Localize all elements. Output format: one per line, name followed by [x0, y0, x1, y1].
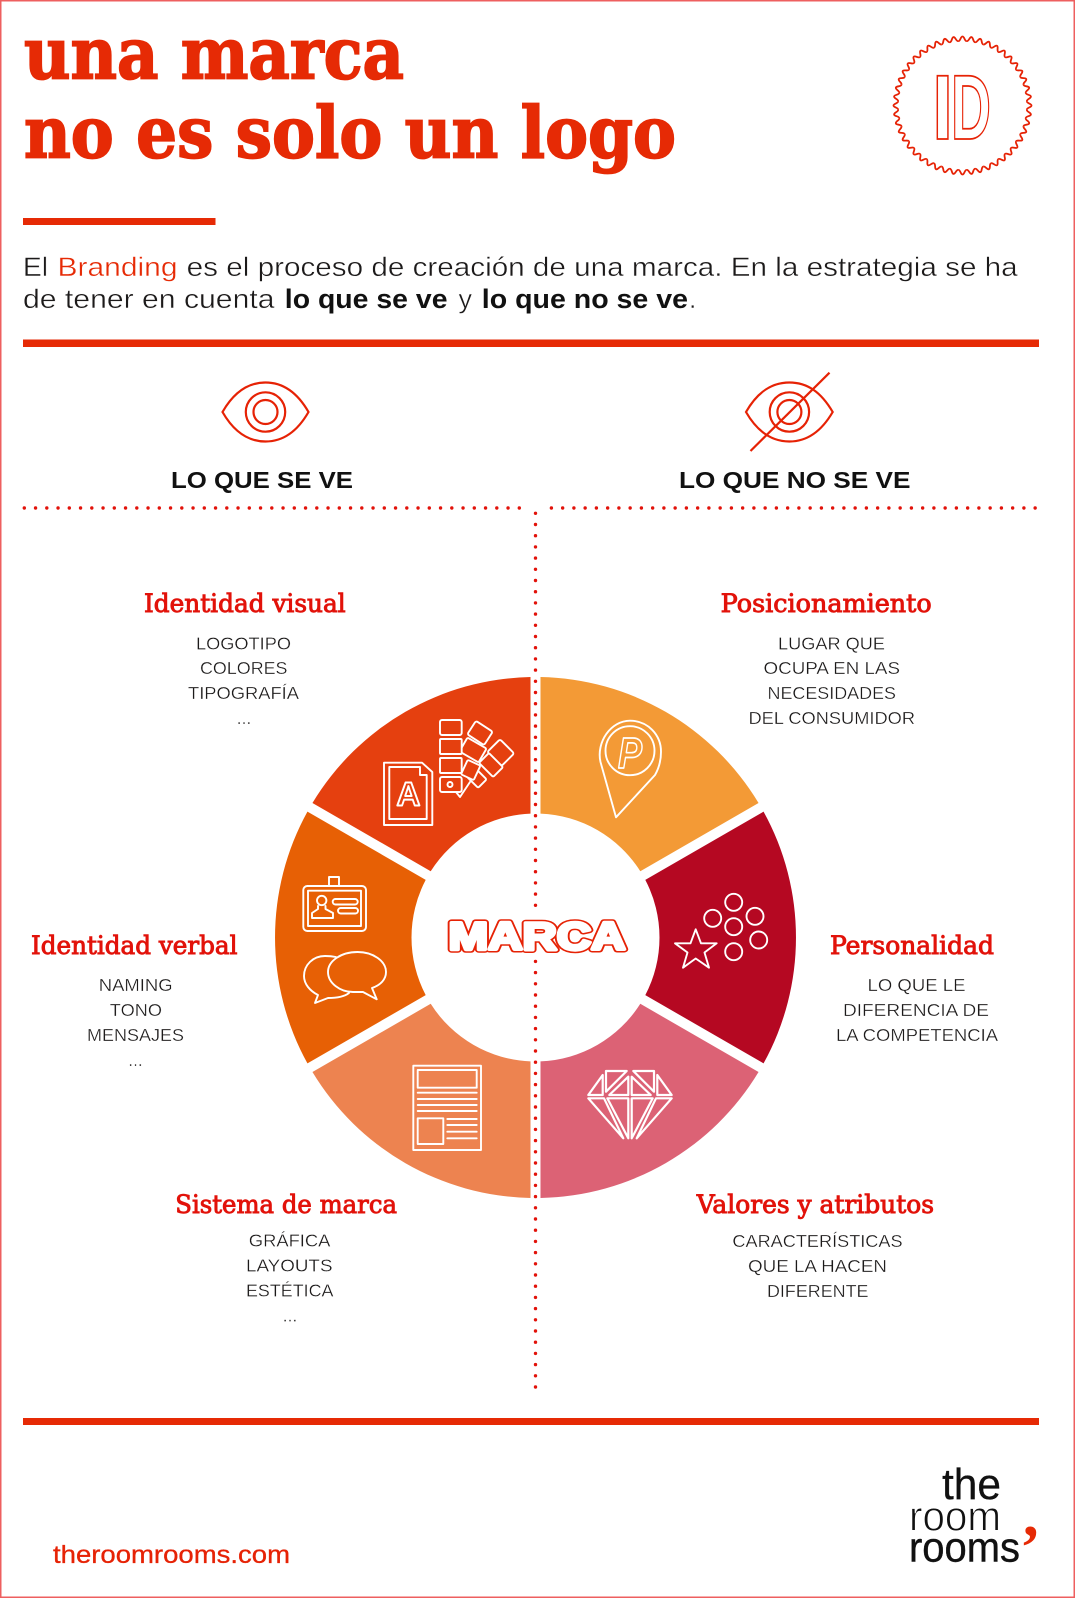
back fan [467, 739, 514, 788]
text block: personalidad: Personalidad [830, 931, 994, 960]
logo: the room rooms: rooms [909, 1524, 1020, 1571]
text block: identidad visual [144, 589, 346, 728]
text block: valores y atributos: Valores y atributos [696, 1190, 934, 1219]
text block: valores y atributos: CARACTERÍSTICAS [732, 1231, 903, 1251]
text block: posicionamiento [721, 589, 932, 728]
text block: valores y atributos [696, 1190, 934, 1301]
icon: newspaper layout [413, 1066, 481, 1150]
text block: identidad verbal: Identidad verbal [31, 931, 238, 960]
intro text: Branding [58, 252, 178, 282]
text block: identidad visual: LOGOTIPO [196, 633, 291, 653]
text block: valores y atributos: QUE LA HACEN [748, 1256, 887, 1276]
segment: sistema de marca [312, 1004, 530, 1198]
text block: posicionamiento: DEL CONSUMIDOR [748, 708, 915, 728]
intro text: y [458, 284, 473, 314]
title [24, 12, 676, 174]
center label: MARCA: MARCA [448, 916, 626, 959]
text block: identidad visual: TIPOGRAFÍA [188, 683, 299, 703]
icon: ID seal [881, 24, 1044, 187]
segment: valores y atributos [540, 1004, 759, 1198]
text block: sistema de marca [175, 1190, 397, 1326]
text block: sistema de marca: GRÁFICA [249, 1231, 331, 1251]
title: una marca [24, 12, 404, 96]
text block: identidad verbal: TONO [110, 1000, 162, 1020]
center label: MARCA: MARCA [448, 916, 626, 959]
text block: posicionamiento: NECESIDADES [768, 683, 896, 703]
text block: personalidad: DIFERENCIA DE [843, 1000, 989, 1020]
icon: ID badge [303, 877, 366, 931]
icon: eye [222, 382, 308, 442]
icon: speech bubbles [304, 952, 386, 1003]
text block: sistema de marca: Sistema de marca [175, 1190, 397, 1219]
logo: the room rooms [909, 1460, 1041, 1582]
text block: personalidad [830, 931, 998, 1045]
heading: lo que no se ve: LO QUE NO SE VE [679, 467, 910, 493]
icon: location pin: P [618, 729, 643, 778]
front column [440, 720, 462, 792]
text block: posicionamiento: OCUPA EN LAS [764, 658, 900, 678]
logo: the room rooms: ’ [1020, 1514, 1041, 1582]
text block: personalidad: LO QUE LE [868, 975, 966, 995]
chart: brand donut [275, 677, 796, 1198]
footer url: theroomrooms.com [53, 1541, 290, 1569]
intro text: lo que no se ve [482, 284, 688, 314]
segment: personalidad [645, 812, 796, 1063]
icon: location pin [600, 721, 661, 817]
icon: star and circles [675, 894, 767, 968]
intro text: El [23, 252, 48, 282]
text block: posicionamiento: Posicionamiento [721, 589, 932, 618]
icon: document with letter A: A [396, 776, 420, 812]
text block: posicionamiento: LUGAR QUE [778, 633, 885, 653]
long red rule top [23, 340, 1039, 347]
icon: document with letter A [384, 763, 432, 825]
intro text: es el proceso de creación de una marca. En la estrategia se ha [187, 252, 1018, 282]
icon: diamond [588, 1071, 672, 1138]
logo: the room rooms: room [909, 1493, 1001, 1540]
intro text: de tener en cuenta [23, 284, 275, 314]
text block: identidad visual: Identidad visual [144, 589, 346, 618]
short red rule [23, 218, 216, 225]
intro text [23, 252, 1018, 314]
text block: sistema de marca: ESTÉTICA [246, 1280, 334, 1300]
long red rule bottom [23, 1418, 1039, 1425]
icon: colour swatches [440, 720, 514, 797]
text block: sistema de marca: LAYOUTS [246, 1256, 332, 1276]
text block: identidad verbal: ... [128, 1050, 143, 1070]
icon: crossed eye [746, 373, 833, 451]
text block: identidad verbal: NAMING [99, 975, 173, 995]
icon: ID seal: I [932, 57, 953, 159]
logo: the room rooms: the [942, 1460, 1001, 1509]
text block: valores y atributos: DIFERENTE [767, 1281, 868, 1301]
intro text: . [689, 284, 696, 314]
text block: identidad verbal [31, 931, 238, 1070]
text block: identidad visual: COLORES [200, 658, 288, 678]
front fan [456, 721, 493, 797]
icon: ID seal: D [951, 57, 991, 159]
text block: personalidad: LA COMPETENCIA [836, 1025, 998, 1045]
text block: identidad visual: ... [237, 708, 251, 728]
segment: posicionamiento [540, 677, 759, 871]
title: no es solo un logo [24, 90, 676, 174]
heading: lo que se ve: LO QUE SE VE [171, 467, 353, 493]
segment: identidad visual [312, 677, 530, 871]
segment: identidad verbal [275, 812, 426, 1063]
text block: identidad verbal: MENSAJES [87, 1025, 184, 1045]
text block: sistema de marca: ... [283, 1306, 297, 1326]
intro text: lo que se ve [285, 284, 448, 314]
